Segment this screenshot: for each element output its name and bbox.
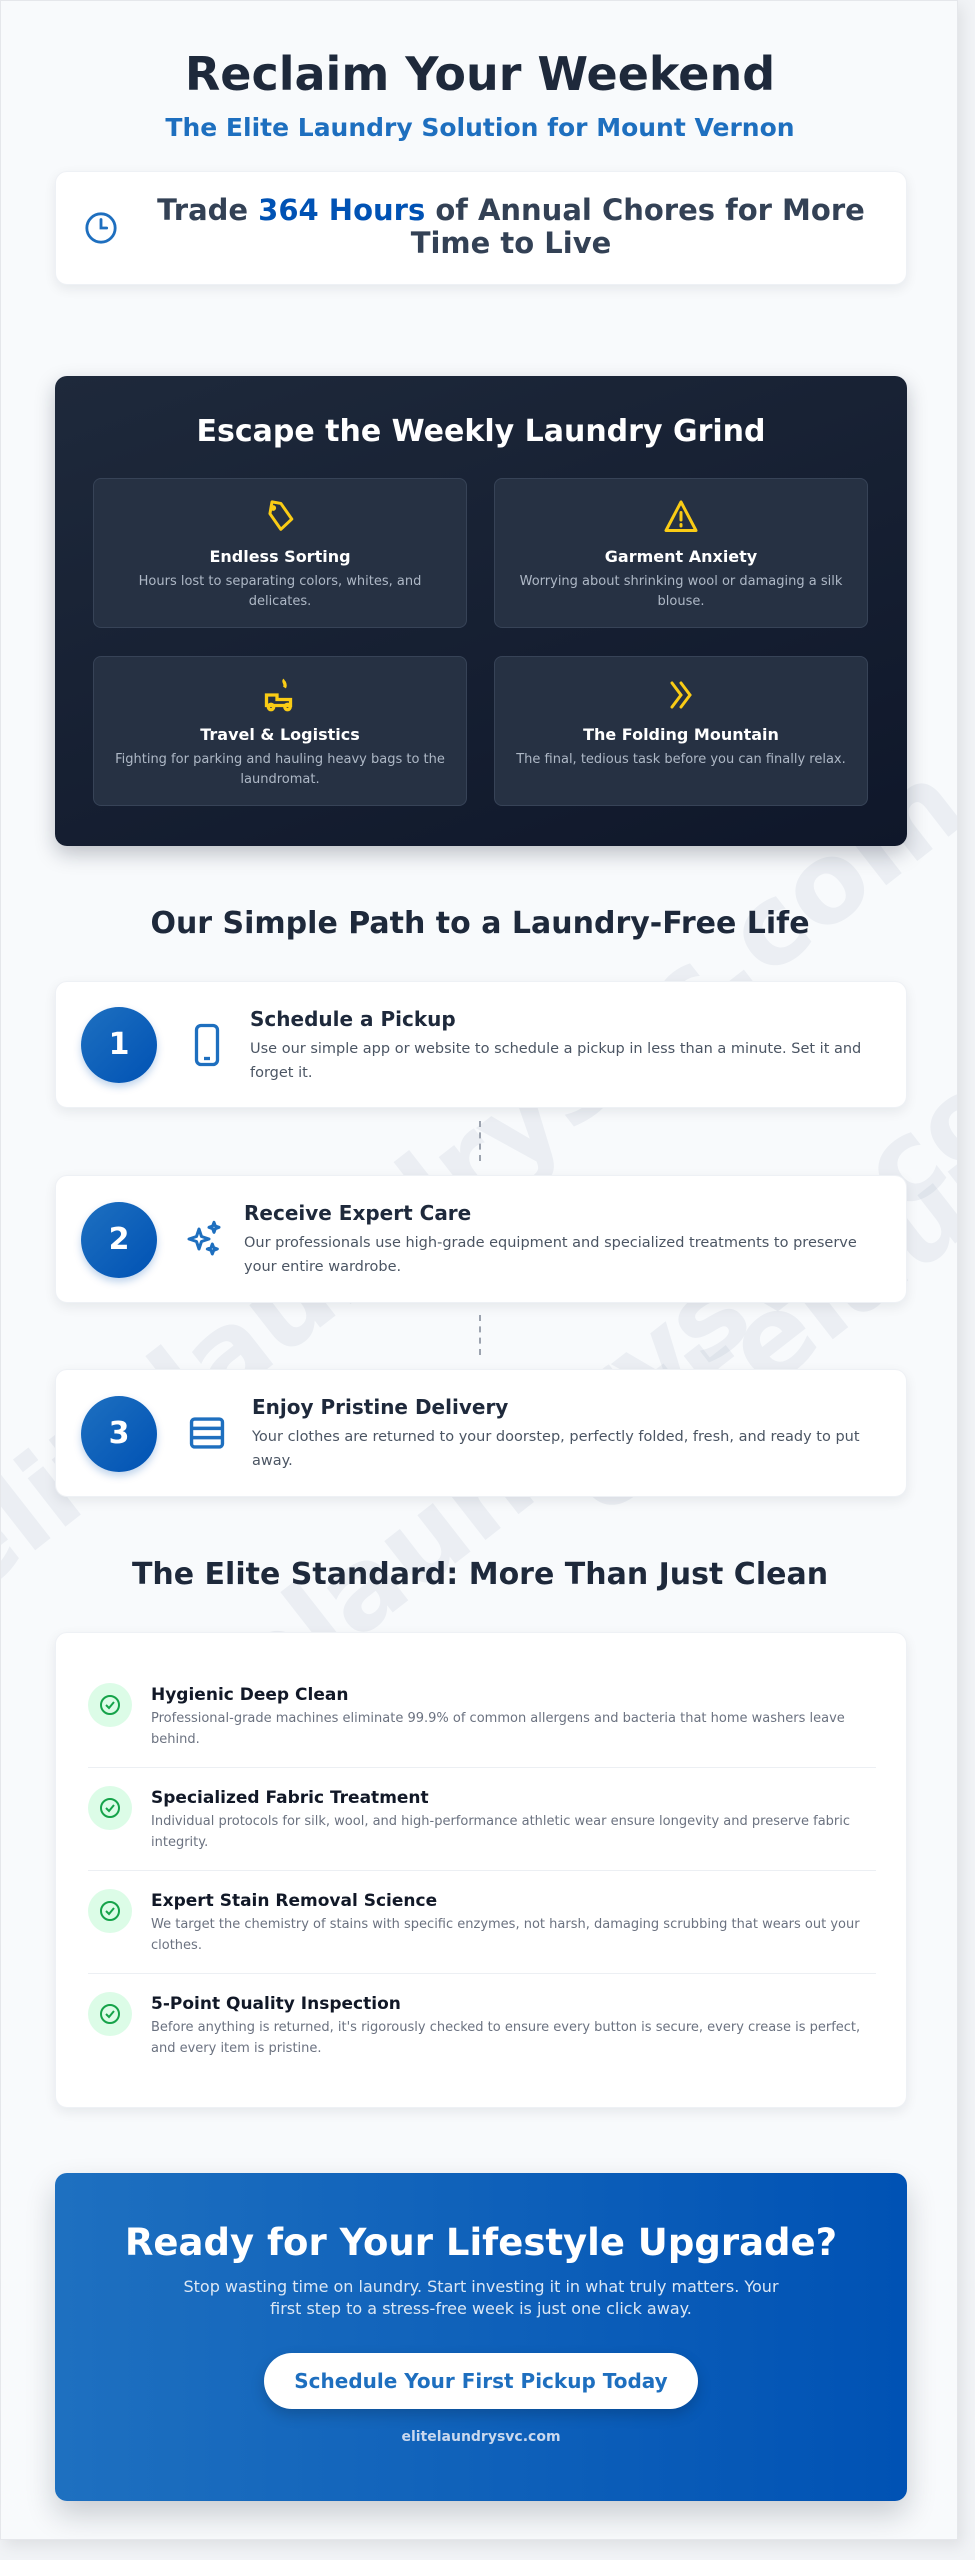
feature 2: Specialized Fabric Treatment bbox=[151, 1788, 429, 1808]
feature 1: Hygienic Deep Clean bbox=[151, 1685, 348, 1705]
feature 3 bbox=[88, 1889, 860, 1953]
step 2: 2 bbox=[109, 1222, 129, 1257]
CTA button bbox=[264, 2353, 698, 2409]
card: travel: Travel & Logistics bbox=[200, 725, 360, 744]
section heading: process: Our Simple Path to a Laundry-Free Life bbox=[150, 906, 810, 941]
stat card bbox=[55, 171, 907, 285]
stat text: Trade 364 Hours of Annual Chores for More Time to Live bbox=[157, 193, 865, 260]
card: endless sorting bbox=[93, 478, 467, 628]
panel heading: Escape the Weekly Laundry Grind bbox=[197, 414, 765, 449]
feature 4: 5-Point Quality Inspection bbox=[151, 1994, 401, 2014]
step 1: Use our simple app or website to schedule a pickup in less than a minute. Set it and forget it. bbox=[250, 1041, 861, 1081]
icon: sparkles bbox=[188, 1220, 220, 1256]
section heading: standard: The Elite Standard: More Than Just Clean bbox=[132, 1557, 828, 1592]
icon: stack bbox=[190, 1417, 224, 1449]
card: travel bbox=[93, 656, 467, 806]
CTA button: Schedule Your First Pickup Today bbox=[294, 2369, 668, 2393]
card: folding: The final, tedious task before you can finally relax. bbox=[516, 752, 846, 767]
features card bbox=[55, 1632, 907, 2108]
feature 3: We target the chemistry of stains with specific enzymes, not harsh, damaging scrubbing that wears out your clothes. bbox=[151, 1917, 860, 1953]
card: endless sorting: Endless Sorting bbox=[209, 547, 351, 566]
title: Reclaim Your Weekend bbox=[185, 47, 775, 101]
feature 2 bbox=[88, 1786, 850, 1850]
step 1 bbox=[55, 981, 907, 1108]
step 1: 1 bbox=[109, 1027, 129, 1062]
subtitle: The Elite Laundry Solution for Mount Vernon bbox=[165, 113, 795, 142]
URL: elitelaundrysvc.com bbox=[401, 2429, 561, 2445]
feature 2: Individual protocols for silk, wool, and high-performance athletic wear ensure longevity and preserve fabric integrity. bbox=[151, 1814, 850, 1850]
step 3: 3 bbox=[109, 1416, 129, 1451]
step 2: Our professionals use high-grade equipment and specialized treatments to preserve your entire wardrobe. bbox=[244, 1235, 857, 1275]
card: garment anxiety bbox=[494, 478, 868, 628]
CTA panel bbox=[55, 2173, 907, 2501]
feature 4: Before anything is returned, it's rigorously checked to ensure every button is secure, every crease is perfect, and every item is pristine. bbox=[151, 2020, 860, 2056]
card: travel: Fighting for parking and hauling heavy bags to the laundromat. bbox=[115, 752, 445, 787]
step 3: Enjoy Pristine Delivery bbox=[252, 1395, 508, 1419]
step 3 bbox=[55, 1369, 907, 1497]
step 2: Receive Expert Care bbox=[244, 1201, 471, 1225]
CTA heading: Ready for Your Lifestyle Upgrade? bbox=[125, 2221, 837, 2264]
icon: phone bbox=[194, 1024, 220, 1066]
connector bbox=[479, 1121, 481, 1161]
feature 3: Expert Stain Removal Science bbox=[151, 1891, 437, 1911]
CTA text: Stop wasting time on laundry. Start investing it in what truly matters. Your first step to a stress-free week is just one click away. bbox=[183, 2277, 779, 2318]
feature 1 bbox=[88, 1683, 845, 1747]
step 2 bbox=[55, 1175, 907, 1303]
card: folding: The Folding Mountain bbox=[583, 725, 779, 744]
card: endless sorting: Hours lost to separating colors, whites, and delicates. bbox=[139, 574, 421, 609]
step 3: Your clothes are returned to your doorstep, perfectly folded, fresh, and ready to put away. bbox=[252, 1429, 860, 1469]
card: garment anxiety: Worrying about shrinking wool or damaging a silk blouse. bbox=[520, 574, 842, 609]
panel: pain points bbox=[55, 376, 907, 846]
icon: clock bbox=[85, 212, 117, 244]
card: folding bbox=[494, 656, 868, 806]
step 1: Schedule a Pickup bbox=[250, 1007, 456, 1031]
connector bbox=[479, 1315, 481, 1355]
feature 1: Professional-grade machines eliminate 99.9% of common allergens and bacteria that home washers leave behind. bbox=[151, 1711, 845, 1747]
card: garment anxiety: Garment Anxiety bbox=[605, 547, 757, 566]
feature 4 bbox=[88, 1992, 860, 2056]
